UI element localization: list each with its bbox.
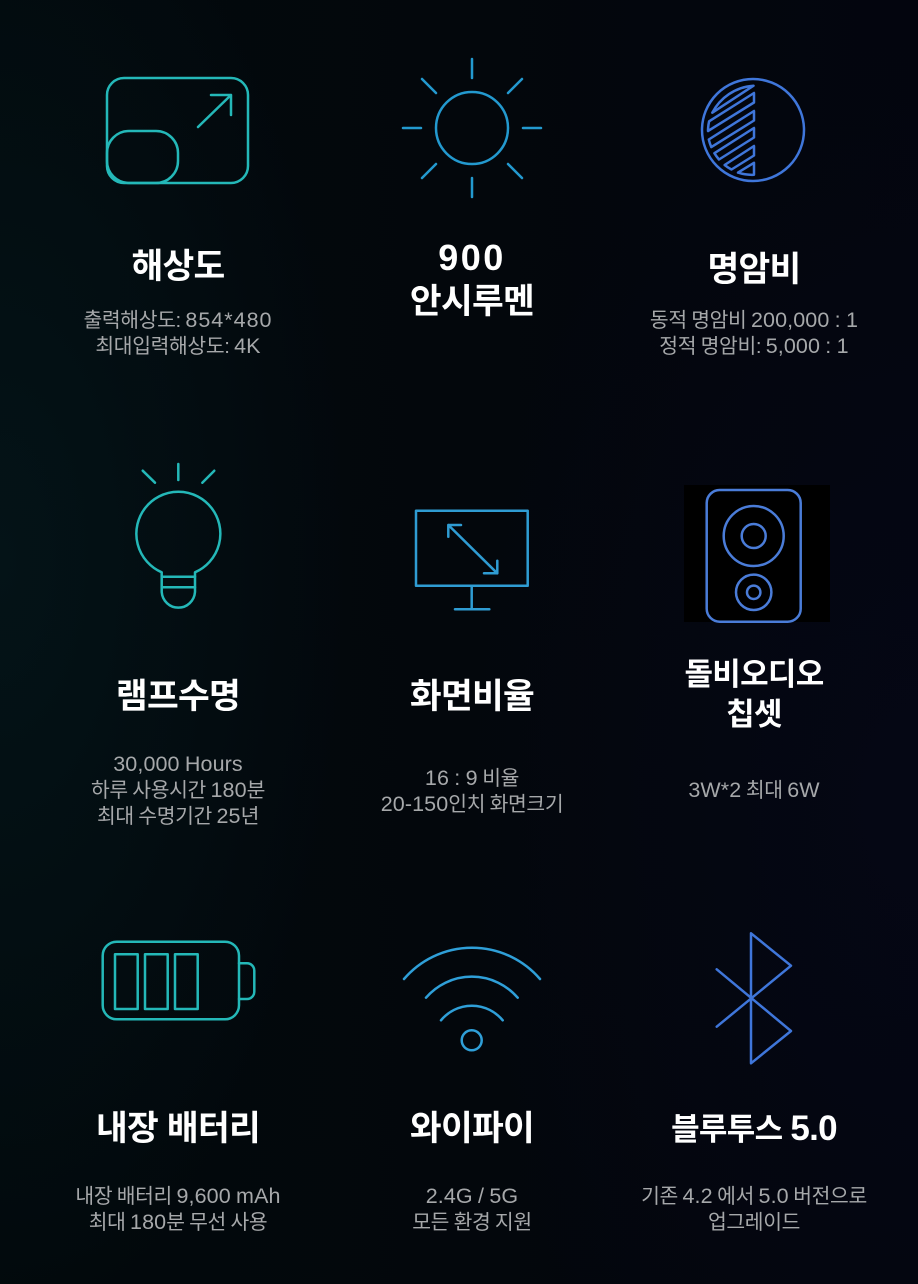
icon: monitor with diagonal arrow [414, 510, 529, 610]
panel: brightness [402, 58, 542, 320]
text: resolution details [83, 308, 272, 358]
heading: bluetooth: 블루투스 5.0 [671, 1109, 837, 1148]
text: resolution details: 출력해상도: 854*480 [83, 308, 272, 332]
text: screen ratio details [381, 766, 563, 816]
text: screen ratio details: 16 : 9 비율 [425, 766, 519, 790]
heading: lamp life: 램프수명 [116, 678, 240, 716]
heading: resolution: 해상도 [131, 248, 225, 286]
icon: sun [402, 58, 542, 198]
text: bluetooth details: 업그레이드 [708, 1212, 800, 1234]
heading: battery: 내장 배터리 [96, 1110, 260, 1148]
icon: resolution expand [106, 76, 250, 184]
heading: dolby audio chipset: 돌비오디오 [684, 657, 824, 692]
text: resolution details: 최대입력해상도: 4K [95, 334, 261, 358]
text: lamp life details: 하루 사용시간 180분 [91, 778, 265, 802]
panel: lamp life [91, 462, 265, 828]
text: battery details [75, 1184, 281, 1234]
panel: battery [75, 940, 281, 1234]
text: wifi details [412, 1184, 532, 1234]
text: lamp life details: 최대 수명기간 25년 [97, 804, 259, 828]
icon: speaker [684, 485, 830, 623]
heading: brightness: 안시루멘 [410, 282, 534, 320]
text: screen ratio details: 20-150인치 화면크기 [381, 792, 563, 816]
heading: contrast: 명암비 [707, 251, 801, 289]
icon: battery [101, 940, 256, 1020]
panel: screen ratio [381, 510, 563, 816]
text: wifi details: 모든 환경 지원 [412, 1212, 532, 1234]
heading: screen ratio: 화면비율 [410, 678, 534, 716]
text: contrast details: 정적 명암비: 5,000 : 1 [659, 334, 849, 358]
heading: brightness [410, 237, 534, 320]
heading: wifi: 와이파이 [410, 1110, 534, 1148]
heading: dolby audio chipset: 칩셋 [726, 697, 782, 732]
panel: wifi [402, 946, 542, 1234]
text: dolby audio details: 3W*2 최대 6W [688, 778, 820, 802]
panel: contrast [650, 78, 858, 358]
icon: bluetooth [715, 932, 792, 1065]
panel: bluetooth [641, 932, 867, 1234]
text: lamp life details [91, 752, 265, 828]
panel: dolby audio [684, 485, 830, 802]
text: contrast details [650, 308, 858, 358]
text: bluetooth details [641, 1184, 867, 1234]
heading: dolby audio chipset [684, 657, 824, 732]
text: bluetooth details: 기존 4.2 에서 5.0 버전으로 [641, 1184, 867, 1208]
panel: resolution [83, 76, 272, 358]
heading: brightness: 900 [438, 237, 506, 278]
icon: half-hatched circle [700, 78, 806, 182]
icon: wifi [402, 946, 542, 1052]
icon: light bulb [135, 462, 222, 609]
text: contrast details: 동적 명암비 200,000 : 1 [650, 308, 858, 332]
text: lamp life details: 30,000 Hours [113, 752, 243, 776]
text: battery details: 최대 180분 무선 사용 [89, 1210, 267, 1234]
text: wifi details: 2.4G / 5G [426, 1184, 518, 1208]
text: battery details: 내장 배터리 9,600 mAh [75, 1184, 281, 1208]
